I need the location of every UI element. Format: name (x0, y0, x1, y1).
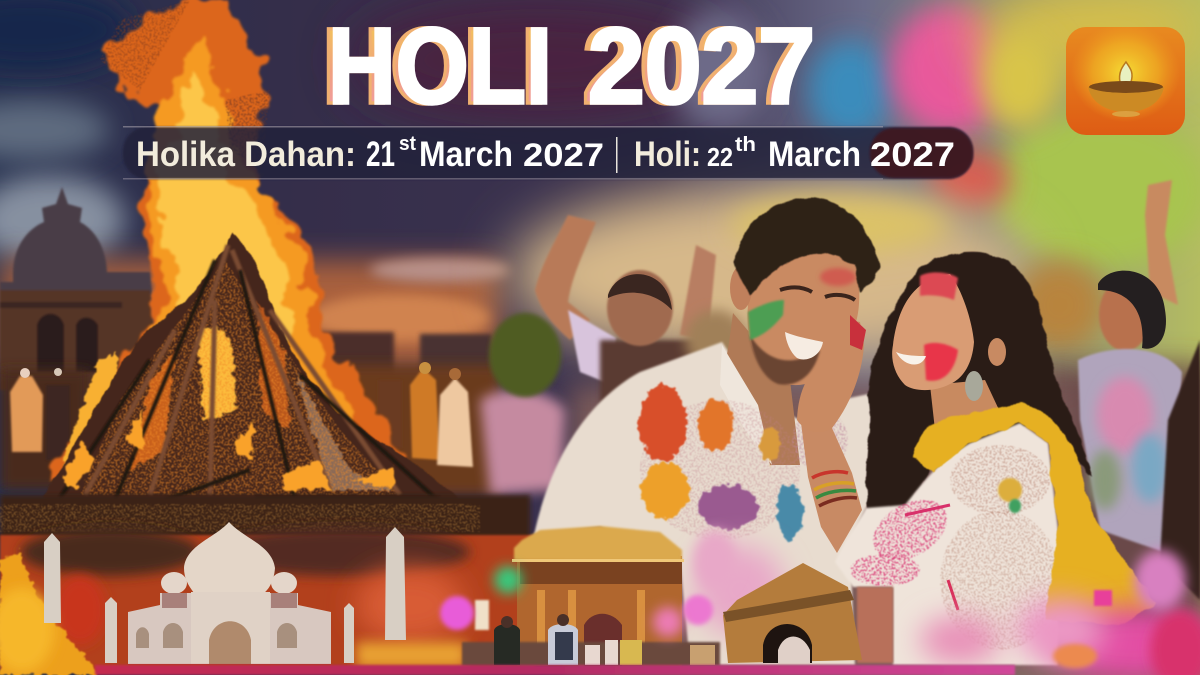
bottom colour strip (95, 665, 1015, 675)
courtyard gate monument (512, 526, 684, 666)
ground below the fire (0, 495, 535, 675)
paint splashes on woman kurta (850, 445, 1060, 664)
title (322, 5, 815, 126)
left temple silhouette (0, 187, 162, 390)
dark grainy smoke in the flame (100, 0, 190, 90)
man laughing mouth (785, 332, 823, 359)
holi colour on woman's face (924, 343, 958, 381)
title: 2027 (588, 5, 815, 126)
title: 2027 (582, 5, 810, 126)
coloured powder at the bottom right (1015, 550, 1200, 675)
red colour on fingers (850, 315, 866, 350)
bonfire log pyre (43, 233, 460, 514)
background reveller with raised arm (480, 215, 745, 495)
title: HOLI (322, 5, 547, 126)
date banner text: 22 (707, 142, 733, 172)
date banner text: March (419, 135, 513, 174)
date banner text: 2027 (523, 137, 604, 173)
date banner text: st (399, 133, 416, 155)
date banner background (123, 126, 973, 180)
woman ear and earring (965, 338, 1006, 401)
woman (797, 252, 1156, 665)
Taj Mahal (44, 522, 406, 664)
holi colour on woman's forehead (920, 272, 958, 300)
woman neck (930, 380, 1000, 430)
man ear (730, 266, 752, 310)
woman kurta (835, 423, 1058, 665)
date banner text: Holika Dahan: (136, 135, 356, 174)
darker lower dress (857, 587, 893, 663)
woman smile (896, 352, 926, 365)
woman arm (800, 415, 862, 553)
glowing powder dots and clouds (440, 530, 737, 637)
woman scarf (913, 403, 1156, 625)
date banner text: Holi: (634, 135, 701, 174)
date banner text (136, 133, 955, 174)
man shirt (534, 342, 885, 665)
man hair (735, 197, 879, 295)
icon: diya oil lamp (1066, 27, 1185, 135)
green paint on man's cheek (748, 300, 784, 340)
man beard (750, 335, 820, 385)
right reveller (1078, 180, 1200, 600)
bonfire flames (45, 0, 412, 478)
title: HOLI (328, 5, 552, 126)
man chest and neck skin (722, 313, 800, 465)
distant buildings and crowd around the fire (0, 332, 500, 495)
date banner text: March (768, 135, 861, 174)
woman hair (866, 252, 1092, 510)
date banner text: 21 (366, 135, 395, 174)
paint splashes on man shirt (639, 385, 848, 635)
crowd at the gate (462, 600, 720, 666)
bangles (812, 472, 857, 506)
date banner text: 2027 (870, 136, 955, 174)
man (534, 197, 885, 665)
woman hand on man's cheek (797, 320, 864, 432)
man face (747, 248, 859, 385)
India Gate monument (723, 563, 862, 663)
date banner text: th (735, 134, 756, 156)
woman face (892, 274, 974, 390)
